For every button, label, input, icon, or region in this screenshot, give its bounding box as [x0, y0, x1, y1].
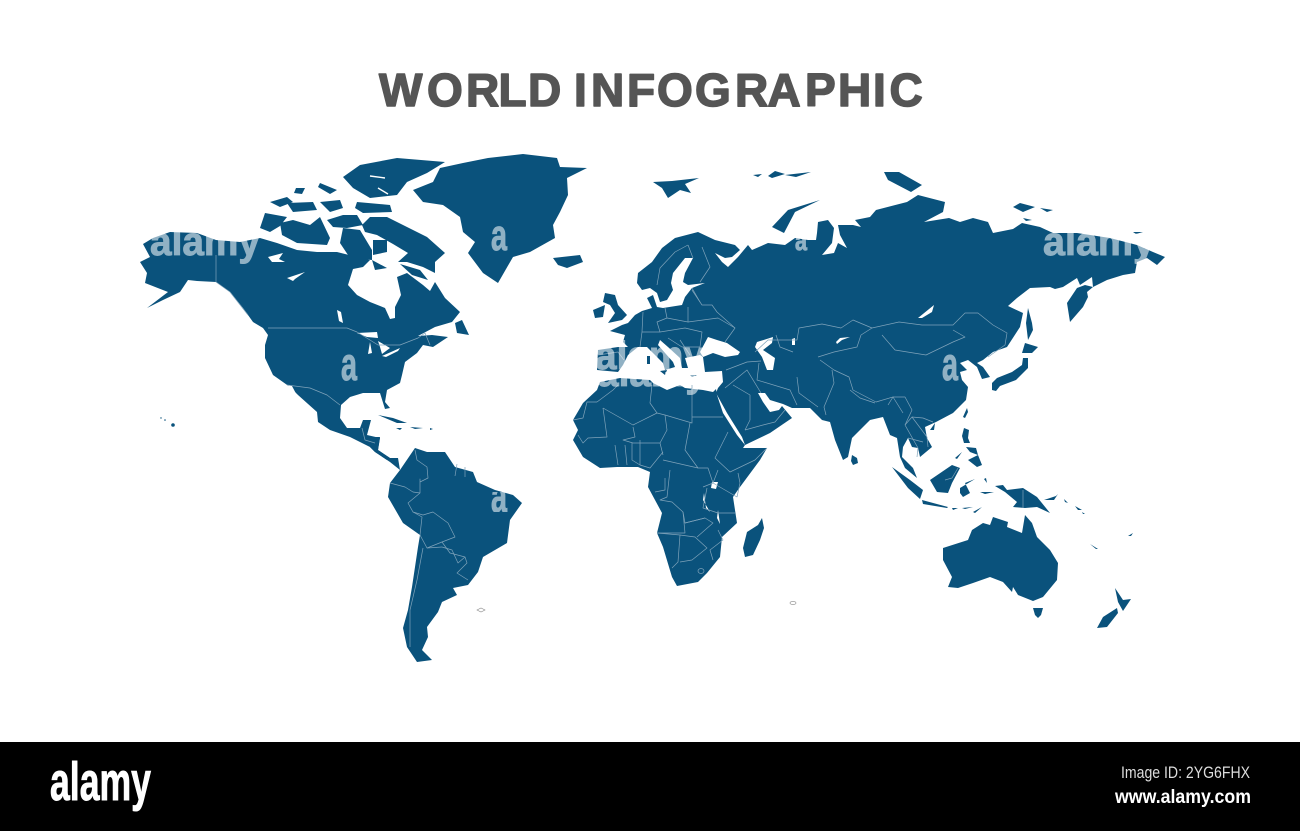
- Southeast Asian islands: [892, 428, 994, 513]
- South America: [370, 437, 522, 662]
- Australia: [943, 515, 1058, 601]
- Arctic Eurasian islands: [653, 171, 1143, 234]
- New Zealand: [1097, 588, 1131, 628]
- Iceland: [553, 255, 583, 268]
- British Isles: [593, 293, 627, 323]
- Madagascar: [743, 518, 764, 557]
- watermark: Brazil: a: [491, 470, 507, 522]
- African lakes: [703, 482, 720, 524]
- world map: [140, 154, 1165, 662]
- Caribbean islands: [378, 415, 433, 430]
- watermark: North America: a: [341, 338, 357, 390]
- alamy watermark overlays: [150, 211, 1156, 522]
- Falkland Islands: [477, 608, 485, 612]
- footer logo: alamy: [50, 752, 151, 812]
- Arctic channels: [370, 176, 388, 194]
- Arctic islands: [260, 158, 469, 335]
- Gulf of California: [288, 385, 306, 413]
- Africa: [573, 378, 767, 586]
- footer url: www.alamy.com: [1114, 787, 1251, 808]
- Mediterranean islands: [647, 356, 697, 377]
- North America: [140, 158, 469, 460]
- Kamchatka: [1067, 285, 1093, 322]
- small outlined islands: [477, 602, 796, 612]
- watermark: Russia: a: [795, 225, 807, 256]
- watermark: Europe: alamy: [595, 334, 706, 378]
- watermark: China: a: [942, 338, 958, 390]
- Hawaii: [171, 423, 175, 427]
- Tasmania: [1033, 608, 1043, 618]
- New Guinea and Pacific islands: [995, 485, 1133, 549]
- Eurasia: [593, 171, 1165, 478]
- Sri Lanka, Taiwan, Hainan: [851, 408, 968, 465]
- Greenland: [413, 154, 587, 283]
- image id: Image ID: 2YG6FHX: [1121, 763, 1250, 782]
- Japan and Sakhalin: [992, 308, 1038, 391]
- title: WORLD INFOGRAPHIC: [379, 64, 923, 116]
- watermark: north-west: alamy: [150, 220, 261, 264]
- country borders: [216, 245, 1023, 647]
- watermark: Greenland: a: [491, 211, 507, 260]
- Kerguelen: [790, 602, 796, 604]
- watermark: north-east: alamy: [1043, 220, 1156, 264]
- footer bar: [0, 742, 1300, 831]
- watermark: North Africa: alamy: [597, 351, 708, 395]
- Canadian lakes: [268, 253, 400, 357]
- inland seas: [700, 305, 934, 370]
